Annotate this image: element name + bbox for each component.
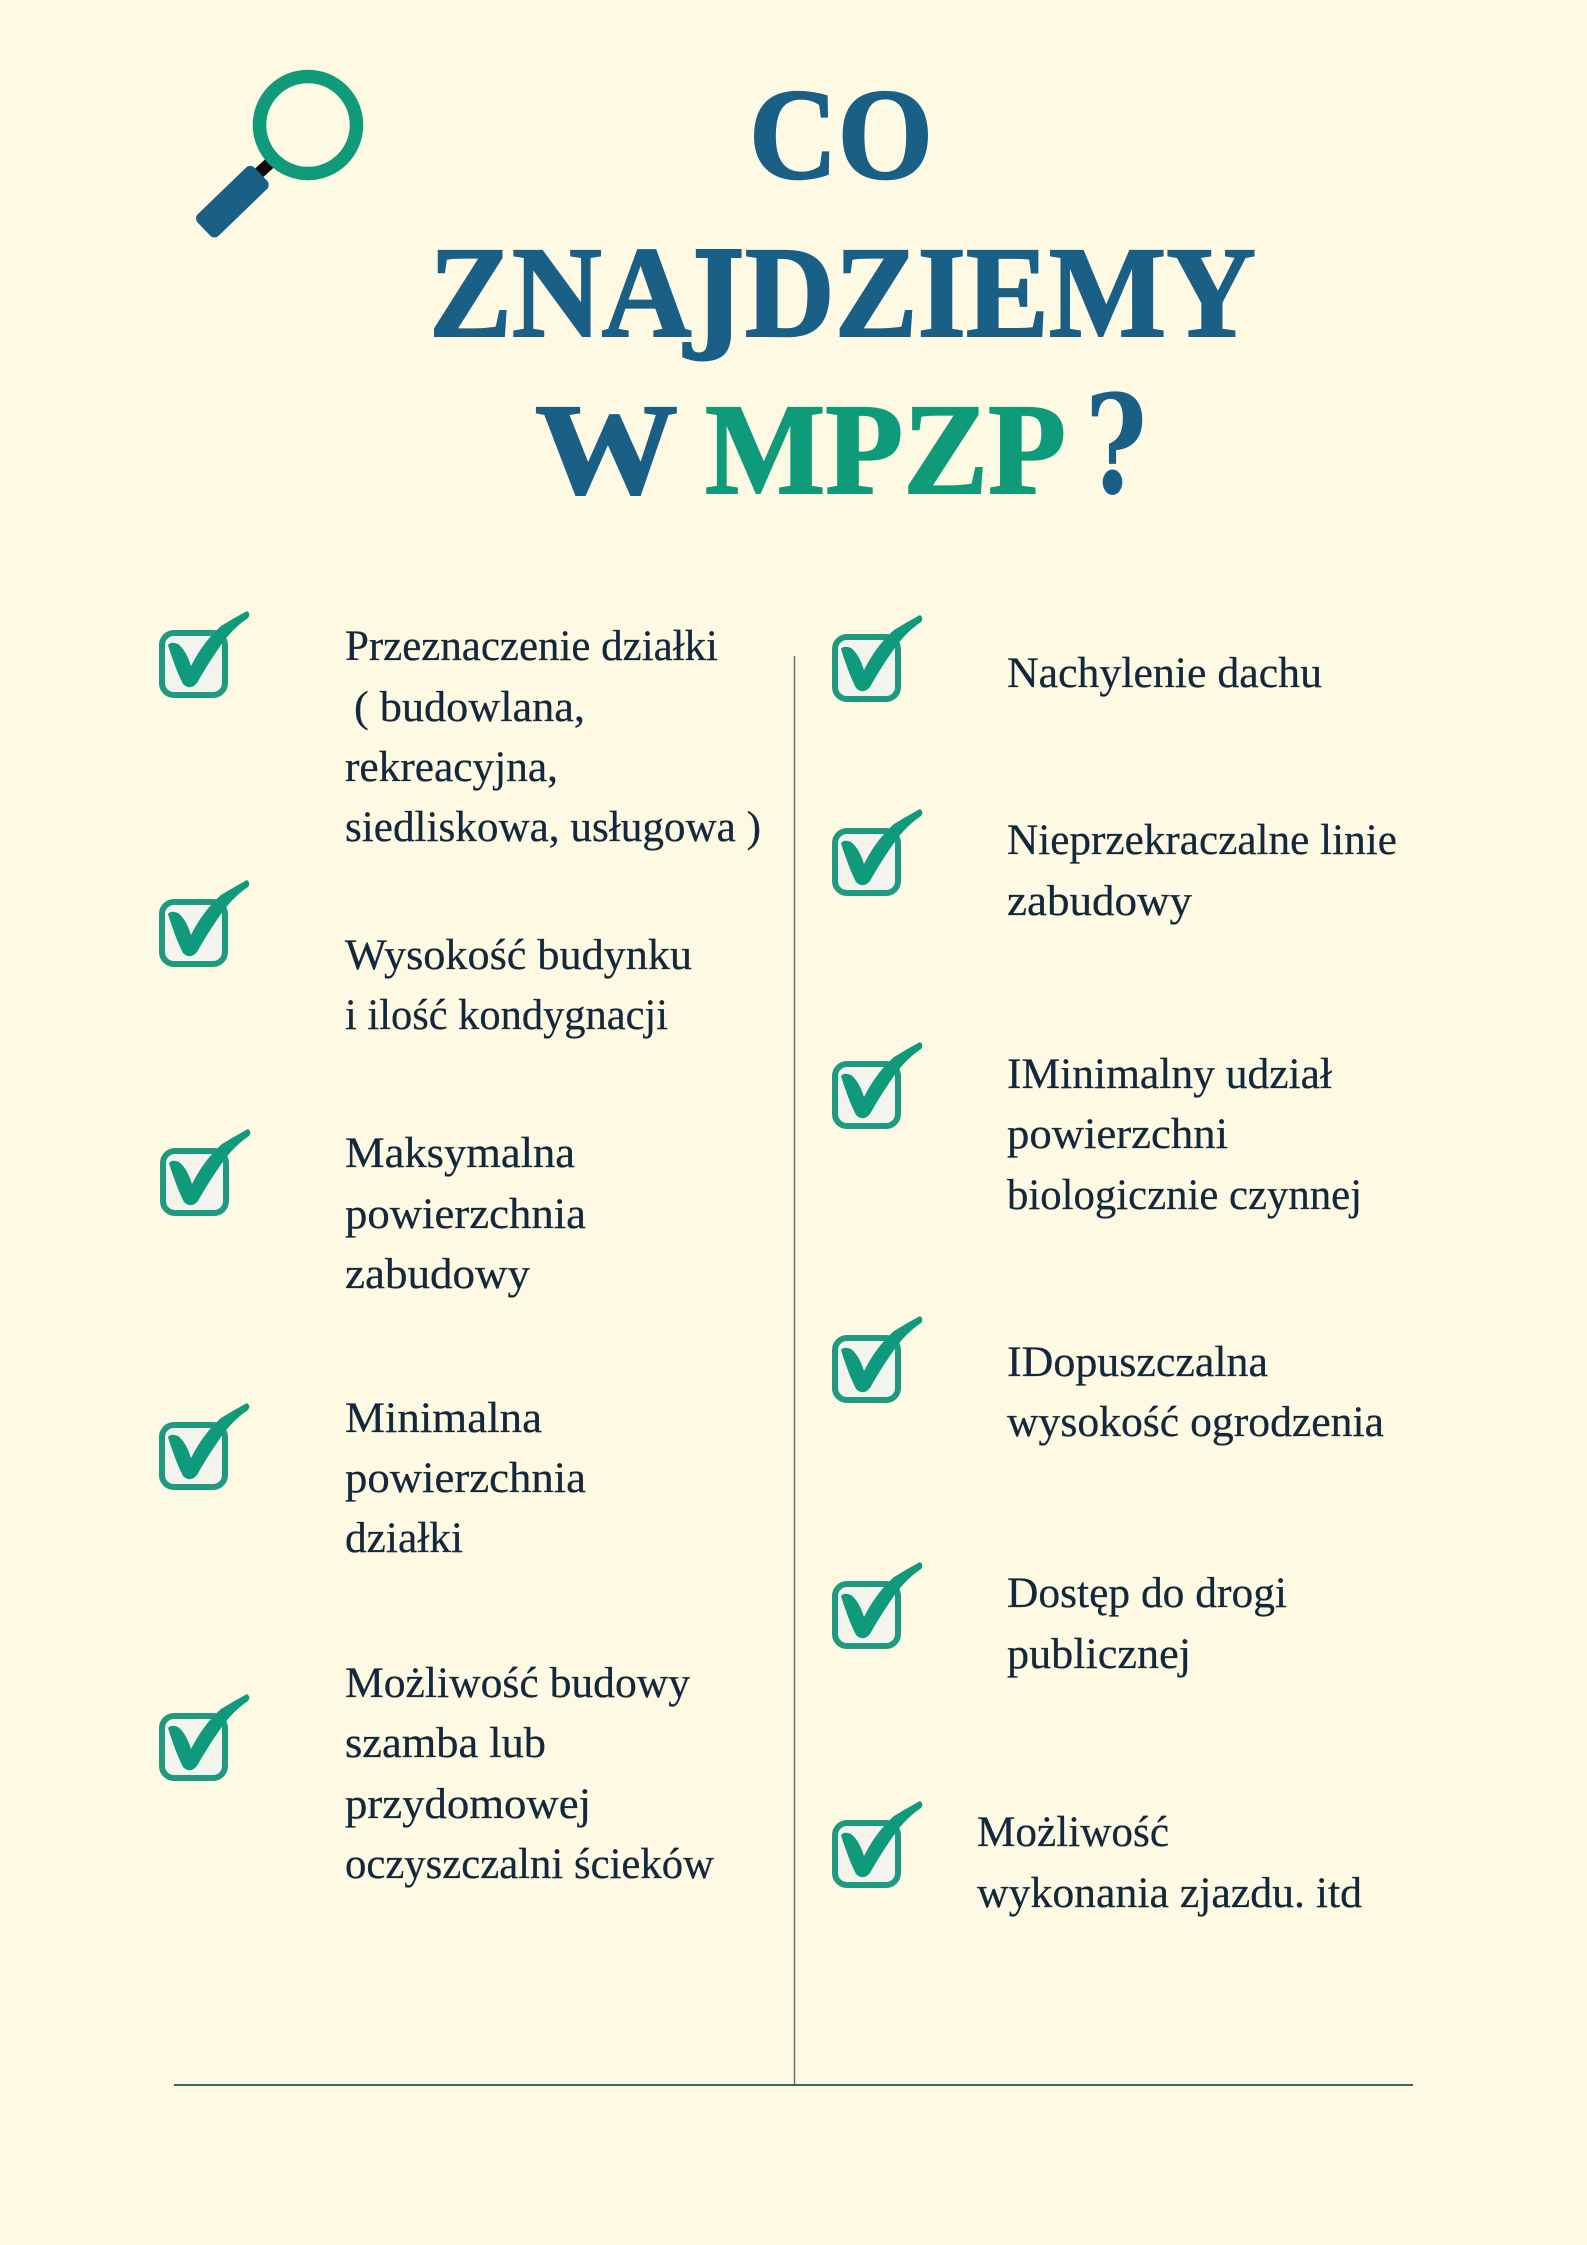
text: biologically active area: biologicznie czynnej	[1007, 1172, 1362, 1219]
text: building height	[345, 932, 692, 1039]
text: roof slope: Nachylenie dachu	[1007, 650, 1322, 697]
icon: checkbox, left 3	[163, 1129, 250, 1213]
text: minimum plot area	[345, 1395, 586, 1562]
text: public road access: Dostęp do drogi	[1007, 1570, 1287, 1617]
text: zoning purpose: ( budowlana,	[354, 684, 585, 731]
text: public road access: publicznej	[1007, 1631, 1191, 1678]
icon: checkbox, right 2	[835, 809, 922, 893]
text: zoning purpose: siedliskowa, usługowa )	[345, 804, 761, 851]
text: max building area: zabudowy	[345, 1251, 531, 1298]
title: ?	[1085, 365, 1147, 526]
text: septic tank: oczyszczalni ścieków	[345, 1841, 714, 1888]
icon: checkbox, right 3	[835, 1042, 922, 1126]
text: driveway: wykonania zjazdu. itd	[977, 1870, 1362, 1917]
text: septic tank	[345, 1660, 714, 1888]
text: fence height: IDopuszczalna	[1007, 1339, 1268, 1386]
text: driveway: Możliwość	[977, 1809, 1169, 1856]
text: biologically active area: IMinimalny udział	[1007, 1051, 1332, 1098]
text: driveway	[977, 1809, 1362, 1917]
text: septic tank: szamba lub	[345, 1720, 546, 1767]
icon: checkbox, right 6	[835, 1801, 922, 1885]
text: building height: Wysokość budynku	[345, 932, 692, 979]
title: MPZP	[705, 378, 1066, 522]
text: biologically active area: powierzchni	[1007, 1111, 1228, 1158]
title: ZNAJDZIEMY	[429, 221, 1256, 365]
icon: magnifying glass	[194, 76, 356, 240]
text: zoning purpose	[345, 623, 761, 851]
text: zoning purpose: rekreacyjna,	[345, 744, 558, 791]
text: max building area: powierzchnia	[345, 1191, 586, 1238]
icon: checkbox, left 1	[162, 611, 249, 695]
text: building lines: Nieprzekraczalne linie	[1007, 817, 1397, 864]
text: public road access	[1007, 1570, 1287, 1678]
text: zoning purpose: Przeznaczenie działki	[345, 623, 718, 670]
text: building height: i ilość kondygnacji	[345, 992, 668, 1039]
title	[429, 63, 1256, 526]
icon: checkbox, left 4	[162, 1403, 249, 1487]
text: building lines: zabudowy	[1007, 878, 1193, 925]
text: fence height	[1007, 1339, 1384, 1446]
text: septic tank: Możliwość budowy	[345, 1660, 691, 1707]
text: minimum plot area: działki	[345, 1515, 463, 1562]
icon: checkbox, right 1	[835, 615, 922, 699]
text: biologically active area	[1007, 1051, 1362, 1219]
text: building lines	[1007, 817, 1397, 925]
text: max building area	[345, 1130, 586, 1298]
text: fence height: wysokość ogrodzenia	[1007, 1399, 1384, 1446]
text: septic tank: przydomowej	[345, 1781, 591, 1828]
icon: checkbox, right 5	[835, 1562, 922, 1646]
text: minimum plot area: Minimalna	[345, 1395, 542, 1442]
title: W	[535, 378, 678, 522]
title: CO	[749, 63, 933, 207]
icon: checkbox, left 5	[162, 1694, 249, 1778]
text: minimum plot area: powierzchnia	[345, 1455, 586, 1502]
icon: checkbox, right 4	[835, 1316, 922, 1400]
text: max building area: Maksymalna	[345, 1130, 575, 1177]
icon: checkbox, left 2	[162, 880, 249, 964]
